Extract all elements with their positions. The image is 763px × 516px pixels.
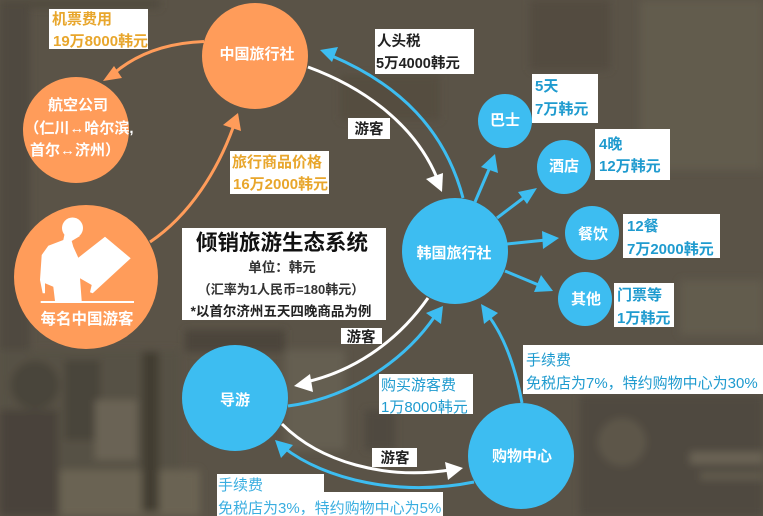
label: tourists (middle): 游客: [346, 328, 376, 346]
node: tour guide: [182, 345, 288, 451]
icon: person reading: [40, 218, 134, 303]
callout: hotel 4 nights: [595, 129, 670, 180]
arrow: Korean agency to hotel: [497, 188, 537, 218]
node: each Chinese tourist: 每名中国游客: [40, 309, 134, 328]
node: shopping centre: 购物中心: [492, 447, 552, 465]
callout: bus 5 days: 5天: [535, 78, 558, 95]
node: Korean travel agency: 韩国旅行社: [416, 244, 492, 262]
node: China travel agency: 中国旅行社: [219, 45, 295, 63]
label: tourists (middle): [341, 328, 382, 346]
arrow: China agency to Korean agency (tourists, white): [308, 67, 443, 192]
arrow: guide to shopping centre (tourists, white): [282, 424, 463, 480]
node: bus: [478, 94, 532, 148]
node: each Chinese tourist: [14, 205, 158, 349]
node: food: 餐饮: [578, 225, 608, 243]
callout: head tax: 5万4000韩元: [376, 54, 460, 72]
callout: shopping centre commission: [523, 345, 763, 394]
callout: head tax: [375, 29, 474, 74]
arrow: shopping centre to guide (blue): [275, 440, 474, 488]
title: 倾销旅游生态系统: [196, 230, 368, 255]
callout: travel product price: 16万2000韩元: [233, 175, 328, 193]
callout: guide commission: [217, 474, 443, 516]
callout: air ticket cost: [49, 9, 148, 50]
node: food: [565, 206, 619, 260]
callout: travel product price: [230, 151, 329, 194]
arrow: Korean agency to guide (tourists, white): [294, 298, 428, 392]
node: hotel: [537, 140, 591, 194]
callout: tickets etc: [614, 283, 674, 327]
callout: meals: 12餐: [627, 217, 659, 235]
node: airline: （仁川↔哈尔滨,: [24, 119, 134, 137]
label: tourists (bottom): [372, 448, 417, 467]
arrow: Korean agency to other: [505, 271, 553, 292]
callout: tickets etc: 1万韩元: [617, 309, 670, 327]
callout: air ticket cost: 19万8000韩元: [53, 32, 148, 50]
arrow: shopping centre to Korean agency (blue): [481, 304, 522, 403]
callout: tickets etc: 门票等: [617, 286, 662, 304]
exchange rate note: （汇率为1人民币=180韩元）: [198, 282, 364, 297]
arrow: Korean agency to bus: [475, 154, 498, 202]
node: airline: 首尔↔济州）: [30, 141, 120, 159]
callout: meals: 7万2000韩元: [627, 240, 714, 258]
label: tourists (top): [348, 118, 390, 139]
arrow: Korean agency to food: [507, 231, 559, 249]
node: China travel agency: [202, 3, 308, 109]
callout: bus 5 days: [532, 74, 598, 123]
unit note: 单位：韩元: [248, 259, 316, 275]
label: tourists (bottom): 游客: [380, 449, 410, 467]
arrow: China agency to airline (orange): [103, 42, 204, 81]
callout: tourist purchase fee: 购买游客费: [381, 377, 456, 394]
node: hotel: 酒店: [549, 158, 579, 175]
callout: shopping centre commission: 免税店为7%，特约购物中心为30%: [526, 375, 758, 392]
label: tourists (top): 游客: [354, 120, 384, 138]
node: other: 其他: [571, 290, 601, 308]
arrow: Korean agency to China agency (head tax, blue): [320, 47, 463, 198]
node: airline: [23, 77, 134, 183]
callout: tourist purchase fee: 1万8000韩元: [381, 399, 468, 416]
callout: travel product price: 旅行商品价格: [232, 153, 322, 171]
node: tour guide: 导游: [220, 391, 250, 409]
callout: head tax: 人头税: [377, 33, 421, 50]
callout: tourist purchase fee: [379, 374, 473, 416]
node: shopping centre: [468, 403, 574, 509]
callout: bus 5 days: 7万韩元: [535, 100, 588, 118]
callout: shopping centre commission: 手续费: [526, 352, 571, 369]
node: other: [558, 272, 612, 326]
example note: *以首尔济州五天四晚商品为例: [191, 303, 371, 319]
arrow: tourist to China agency (orange): [150, 113, 241, 242]
arrow: guide to Korean agency (blue): [288, 306, 443, 406]
node: bus: 巴士: [490, 112, 520, 129]
callout: hotel 4 nights: 4晚: [599, 136, 622, 153]
panel: title block: [182, 228, 386, 320]
callout: guide commission: 手续费: [218, 477, 263, 494]
callout: meals: [623, 214, 720, 258]
node: airline: 航空公司: [48, 96, 108, 114]
callout: air ticket cost: 机票费用: [52, 10, 112, 28]
node: Korean travel agency: [402, 198, 508, 304]
callout: hotel 4 nights: 12万韩元: [599, 157, 661, 175]
